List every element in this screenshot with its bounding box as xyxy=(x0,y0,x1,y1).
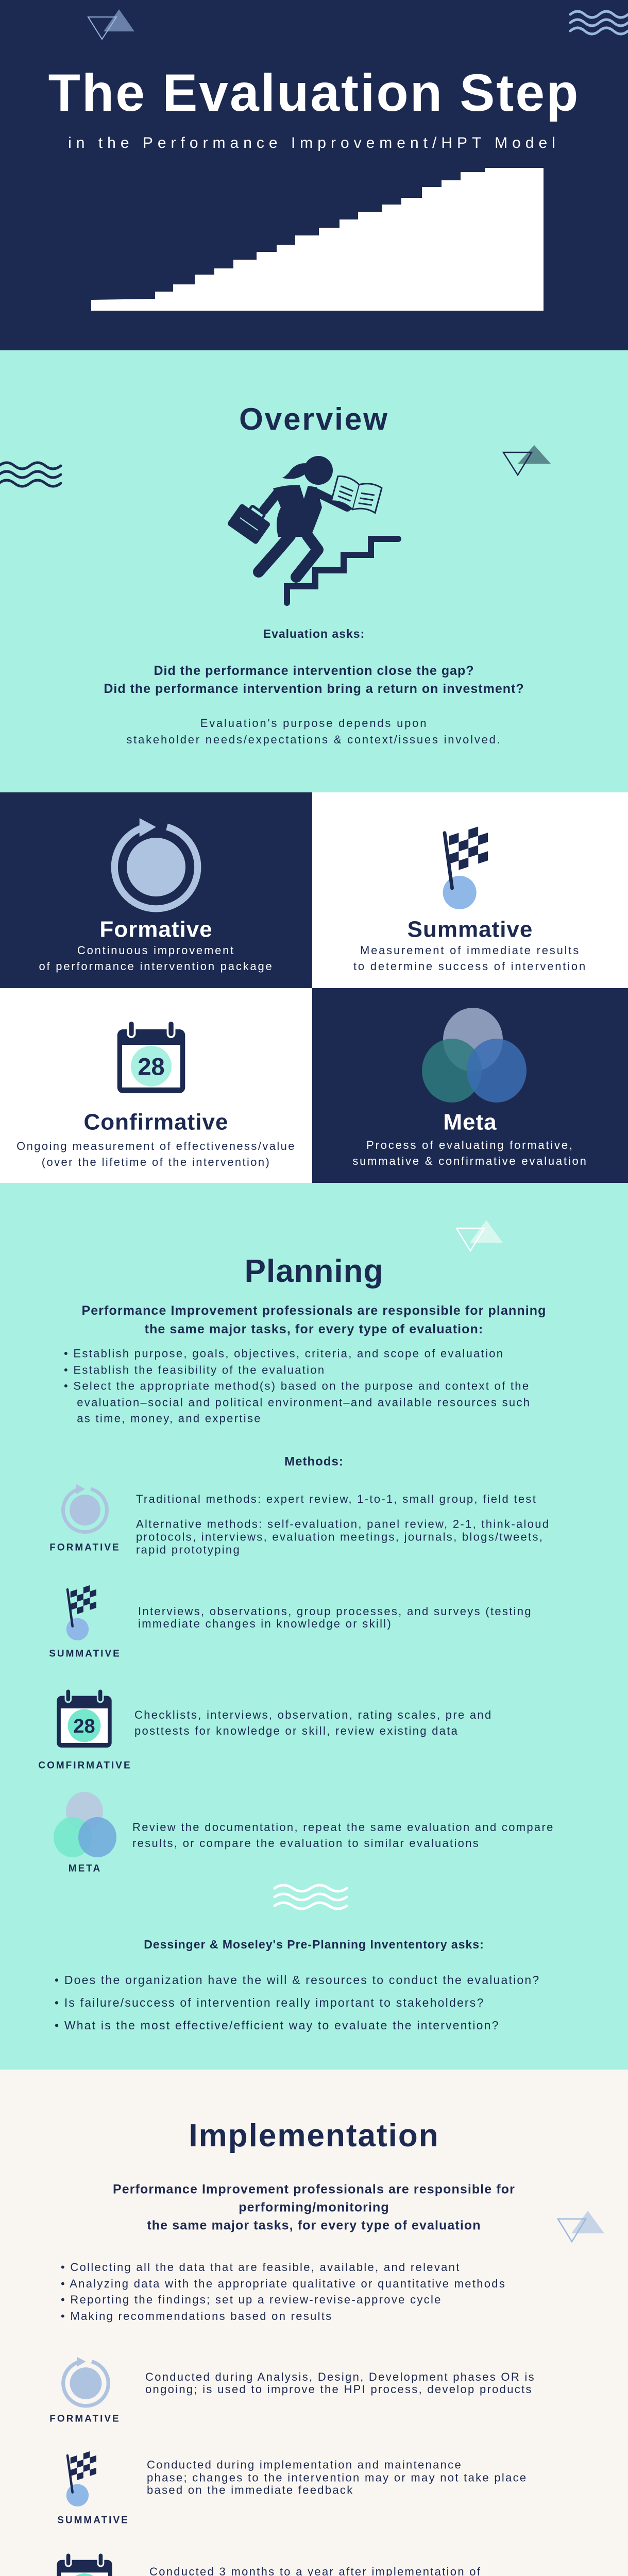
row: summative xyxy=(57,2451,527,2526)
heading: Confirmative xyxy=(84,1110,228,1135)
text: Checklists, interviews, observation, rating scales, pre and xyxy=(134,1708,493,1721)
bullet list: • Reporting the findings; set up a review-revise-approve cycle xyxy=(61,2293,442,2306)
method row: meta xyxy=(54,1792,554,1874)
overview section xyxy=(0,350,628,792)
bullet list: • Establish the feasibility of the evaluation xyxy=(64,1363,325,1376)
intro text: Performance Improvement professionals are responsible for xyxy=(113,2182,515,2197)
bullet list xyxy=(61,2261,506,2323)
description: summative & confirmative evaluation xyxy=(352,1155,588,1167)
intro text xyxy=(81,1303,546,1336)
text: alternative xyxy=(136,1518,550,1556)
description xyxy=(16,1140,296,1168)
text: questions: Did the performance intervention bring a return on investment? xyxy=(104,682,524,696)
panel: confirmative xyxy=(0,988,312,1183)
heading: Overview: Overview xyxy=(239,402,389,436)
subheading: pre-planning inventory: Dessinger & Moseley's Pre-Planning Invententory asks: xyxy=(144,1938,484,1951)
icon: flag xyxy=(59,2445,100,2511)
description: to determine success of intervention xyxy=(353,960,587,973)
text: Interviews, observations, group processes, and surveys (testing xyxy=(138,1605,532,1618)
label: SUMMATIVE xyxy=(49,1649,121,1659)
intro text: performing/monitoring xyxy=(239,2200,389,2214)
text: purpose xyxy=(126,717,502,746)
label: COMFIRMATIVE xyxy=(38,1760,132,1771)
label: SUMMATIVE xyxy=(57,2515,129,2526)
text: questions xyxy=(104,664,524,696)
header section xyxy=(0,0,628,350)
icon: triangles xyxy=(455,1220,503,1252)
text: Review the documentation, repeat the same evaluation and compare xyxy=(132,1821,554,1834)
text xyxy=(138,1605,532,1630)
icon: calendar xyxy=(57,1690,112,1748)
text: Traditional methods: expert review, 1-to-1, small group, field test xyxy=(136,1493,537,1505)
bullet list: • Collecting all the data that are feasible, available, and relevant xyxy=(61,2261,461,2274)
bullet list: • Making recommendations based on results xyxy=(61,2309,333,2323)
row: confirmative xyxy=(31,2551,598,2576)
icon: cycle xyxy=(111,818,201,912)
panel: formative xyxy=(0,792,312,988)
staircase graphic xyxy=(91,168,544,311)
description xyxy=(353,944,587,973)
intro text: Performance Improvement professionals are responsible for planning xyxy=(81,1303,546,1318)
text: based on the immediate feedback xyxy=(147,2483,354,2496)
description: (over the lifetime of the intervention) xyxy=(42,1156,270,1168)
heading: Summative xyxy=(408,917,533,942)
planning section xyxy=(0,1183,628,2070)
bullet list xyxy=(64,1347,531,1425)
label: FORMATIVE xyxy=(49,1543,121,1553)
intro text: the same major tasks, for every type of evaluation: xyxy=(145,1322,483,1336)
bullet list: • Select the appropriate method(s) based on the purpose and context of the xyxy=(64,1379,530,1392)
text: Conducted during implementation and maintenance xyxy=(147,2458,462,2471)
text: ongoing; is used to improve the HPI process, develop products xyxy=(145,2383,533,2396)
heading: Meta xyxy=(443,1110,497,1135)
icon: calendar: 28 xyxy=(138,1053,165,1080)
description: Process of evaluating formative, xyxy=(366,1139,574,1151)
icon: calendar xyxy=(54,2553,115,2576)
description: Measurement of immediate results xyxy=(360,944,580,957)
bullet list: inventory: • Does the organization have the will & resources to conduct the evaluation? xyxy=(55,1973,540,1987)
icon: triangles xyxy=(556,2211,604,2243)
description xyxy=(352,1139,588,1167)
text: questions: Did the performance intervention close the gap? xyxy=(154,664,474,678)
text: results, or compare the evaluation to similar evaluations xyxy=(132,1837,480,1850)
description: of performance intervention package xyxy=(39,960,274,973)
heading: Implementation: Implementation xyxy=(189,2118,439,2154)
icon: calendar: 28 xyxy=(73,1716,95,1737)
icon: checkered flag xyxy=(443,826,488,909)
text: alternative: Alternative methods: self-evaluation, panel review, 2-1, think-aloud xyxy=(136,1518,550,1530)
method row: confirmative xyxy=(38,1690,493,1771)
method row: summative xyxy=(49,1585,532,1659)
text: alternative: rapid prototyping xyxy=(136,1544,241,1556)
label: FORMATIVE xyxy=(49,2414,121,2425)
icon: venn xyxy=(422,1008,527,1103)
text xyxy=(145,2370,535,2396)
bullet list: as time, money, and expertise xyxy=(77,1412,262,1425)
description xyxy=(39,944,274,973)
icon: waves xyxy=(569,10,628,36)
icon: formative xyxy=(61,1484,109,1534)
bullet list: • Analyzing data with the appropriate qualitative or quantitative methods xyxy=(61,2277,506,2290)
heading: Planning: Planning xyxy=(245,1253,383,1289)
icon: waves white xyxy=(273,1884,348,1910)
bullet list: • Establish purpose, goals, objectives, criteria, and scope of evaluation xyxy=(64,1347,504,1360)
text: immediate changes in knowledge or skill) xyxy=(138,1617,392,1630)
text: evaluation asks: Evaluation asks: xyxy=(263,627,365,640)
bullet list: inventory: • What is the most effective/efficient way to evaluate the intervention? xyxy=(55,2019,500,2032)
icon: calendar xyxy=(117,1021,185,1093)
method row: formative xyxy=(49,1484,550,1556)
label: META xyxy=(69,1863,101,1874)
bullet list: evaluation–social and political environment–and available resources such xyxy=(77,1396,531,1409)
intro text xyxy=(113,2182,515,2233)
icon: woman climbing stairs xyxy=(228,456,401,606)
text xyxy=(132,1821,554,1850)
bullet list: inventory xyxy=(55,1973,540,2032)
row: formative xyxy=(49,2357,535,2425)
implementation section xyxy=(0,2070,628,2576)
bullet list: inventory: • Is failure/success of intervention really important to stakeholders? xyxy=(55,1996,484,2009)
subheading: methods: Methods: xyxy=(284,1455,344,1469)
text: purpose: stakeholder needs/expectations & context/issues involved. xyxy=(126,733,502,746)
heading: Formative xyxy=(99,917,213,942)
icon: triangles xyxy=(87,9,134,40)
description: Continuous improvement xyxy=(77,944,235,957)
icon: flag xyxy=(66,1585,96,1640)
icon: waves left xyxy=(0,461,62,488)
subtitle: in the Performance Improvement/HPT Model xyxy=(68,134,560,151)
icon: formative xyxy=(61,2357,110,2408)
text: alternative: protocols, interviews, evaluation meetings, journals, blogs/tweets, xyxy=(136,1530,544,1544)
text: Conducted during Analysis, Design, Development phases OR is xyxy=(145,2370,535,2383)
text xyxy=(147,2459,527,2497)
icon: venn xyxy=(54,1792,116,1857)
panel: summative xyxy=(312,792,628,988)
description: Ongoing measurement of effectiveness/value xyxy=(16,1140,296,1153)
text xyxy=(134,1708,493,1737)
text: purpose: Evaluation's purpose depends upon xyxy=(200,717,428,730)
icon: triangles right xyxy=(502,445,551,476)
panel: meta xyxy=(312,988,628,1183)
intro text: the same major tasks, for every type of evaluation xyxy=(147,2218,481,2233)
text: phase; changes to the intervention may or may not take place xyxy=(147,2471,527,2484)
text: posttests for knowledge or skill, review existing data xyxy=(134,1724,459,1737)
title: The Evaluation Step xyxy=(48,63,580,122)
